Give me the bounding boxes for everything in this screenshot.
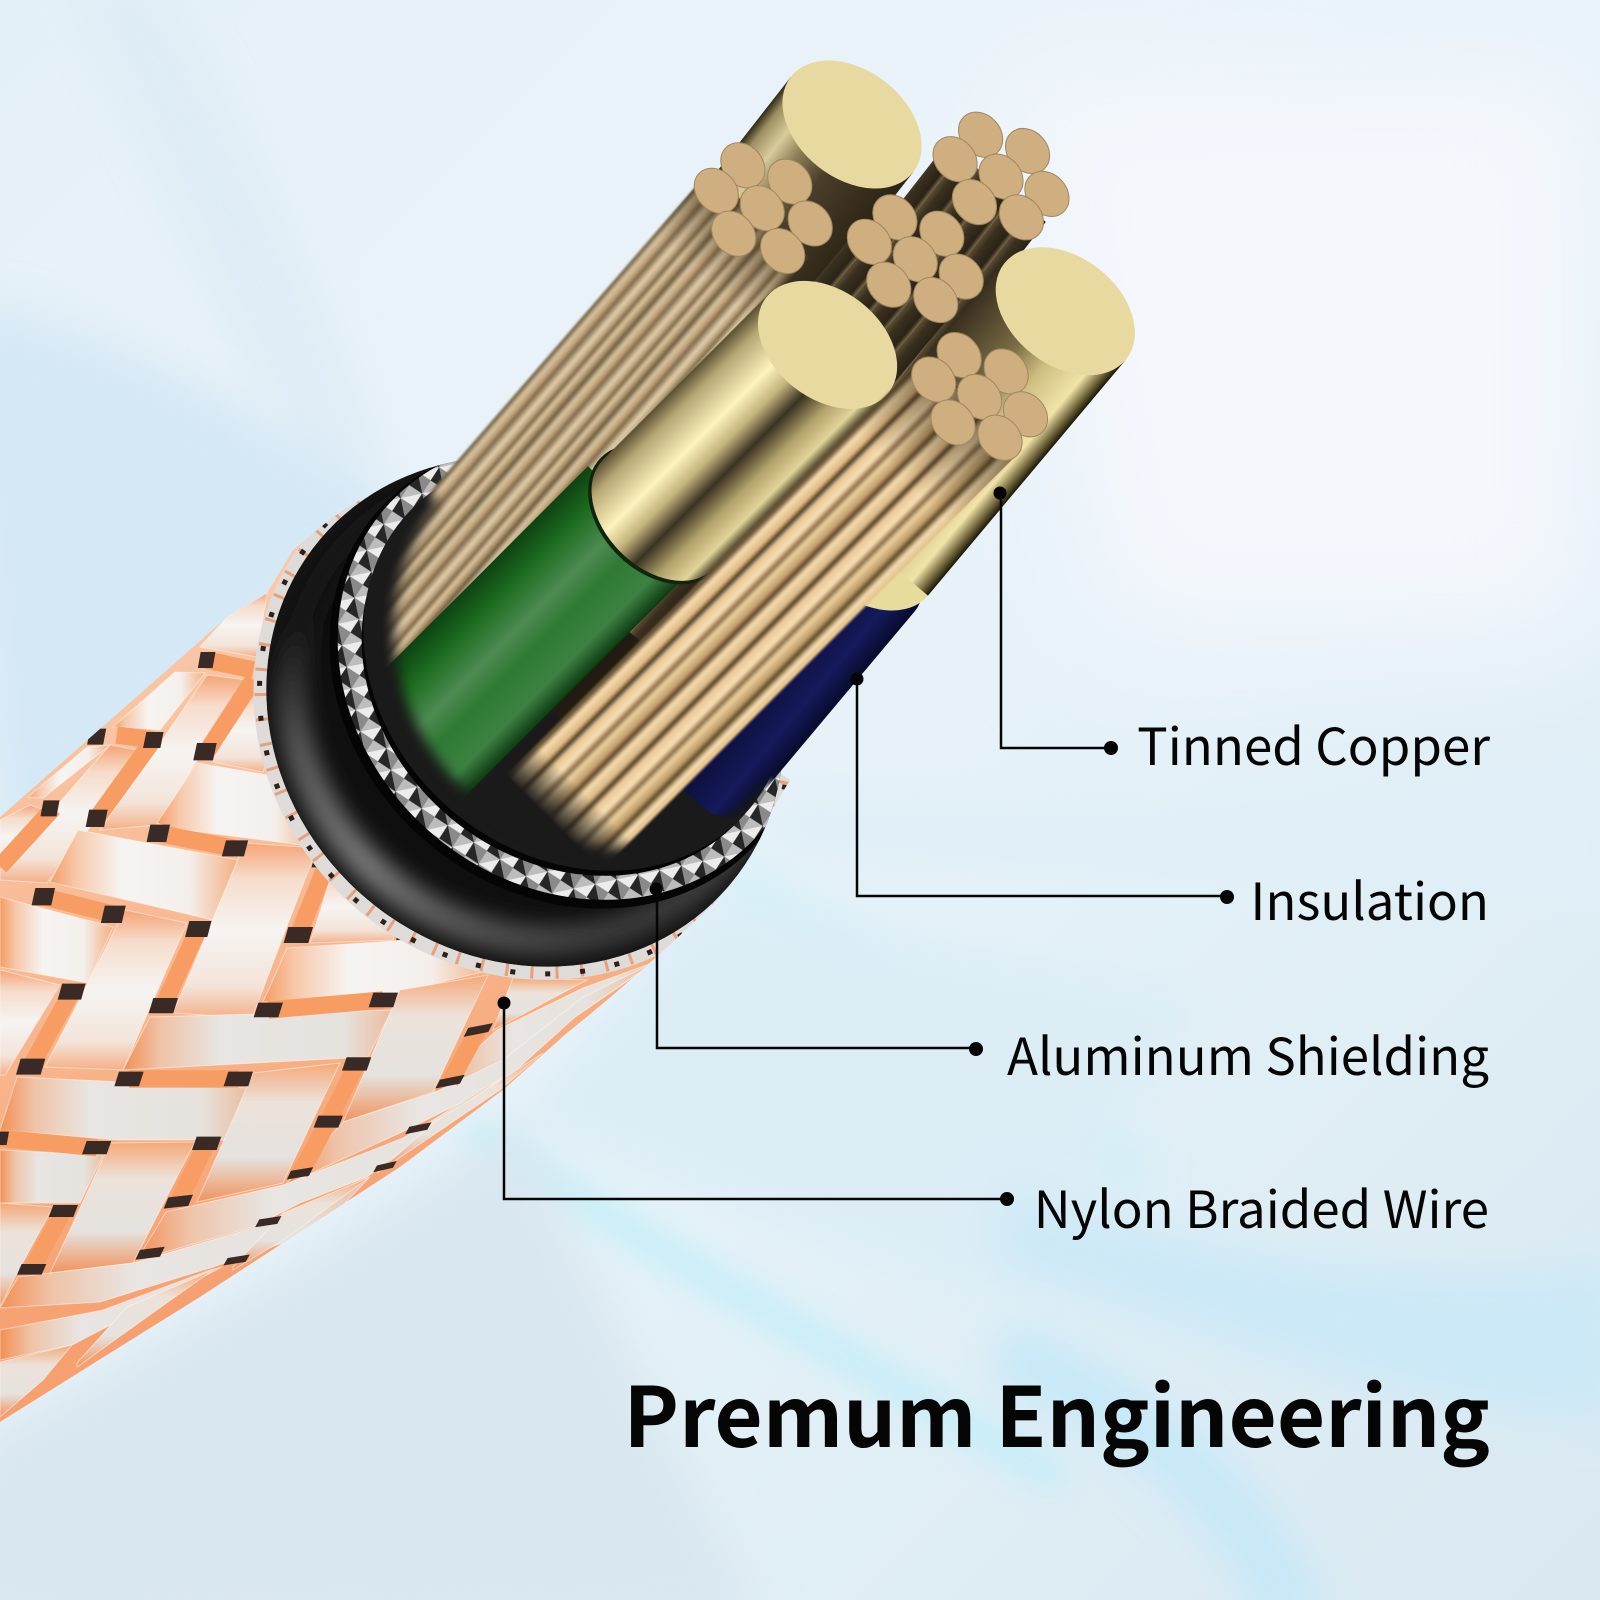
title: Premum Engineering <box>624 1350 1490 1471</box>
blue insulated conductor <box>682 247 1135 818</box>
black collar ring <box>266 461 782 967</box>
leader: Tinned Copper <box>994 486 1118 755</box>
dark core backing <box>558 716 560 718</box>
leader: Insulation <box>850 672 1234 904</box>
back strand bundle <box>871 160 1046 412</box>
left strand bundle <box>384 186 808 666</box>
cable <box>0 34 1163 1422</box>
braided rim under collar <box>253 500 790 980</box>
strand ends <box>685 103 1078 469</box>
leader: Aluminum Shielding <box>650 882 983 1056</box>
back conductor <box>718 60 922 284</box>
inner conductors and insulation <box>384 60 1135 856</box>
orange weave strips <box>0 660 478 1269</box>
leader: Nylon Braided Wire <box>498 996 1014 1206</box>
aluminum foil shielding ring <box>338 461 781 900</box>
label: Aluminum Shielding: Aluminum Shielding <box>1007 1016 1489 1090</box>
label: Nylon Braided Wire: Nylon Braided Wire <box>1034 1169 1489 1243</box>
centre strand bundle <box>630 242 958 641</box>
label: Tinned Copper: Tinned Copper <box>1137 706 1490 780</box>
green insulated conductor <box>388 280 898 796</box>
nylon braided sleeve <box>0 500 790 1422</box>
front strand bundle <box>510 354 1022 856</box>
label: Insulation: Insulation <box>1250 861 1489 935</box>
